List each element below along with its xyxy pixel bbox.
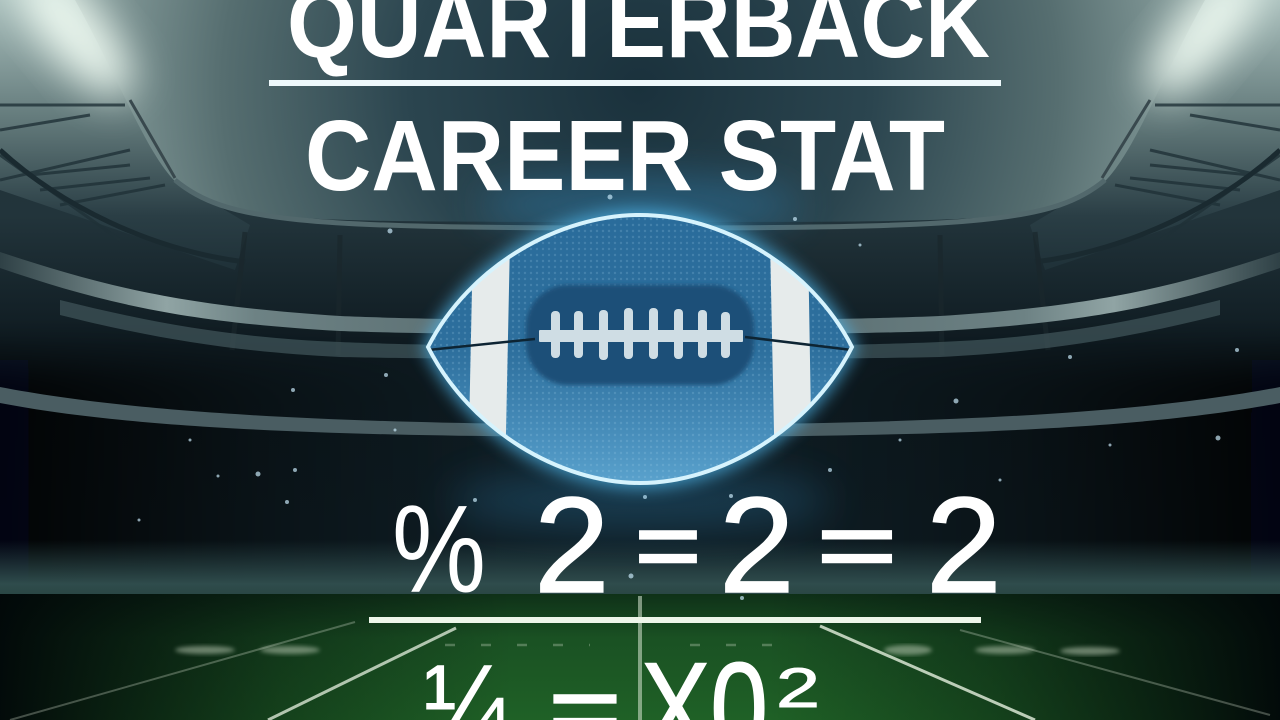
title: career stat: CAREER STAT — [305, 100, 945, 212]
ball right stripe — [770, 259, 811, 434]
lower stand panel — [60, 300, 1220, 359]
formula: upper line: % — [392, 481, 486, 619]
upper stand band — [0, 252, 1280, 335]
field lines — [10, 596, 1270, 720]
ball left stripe — [470, 259, 510, 434]
floodlight: right — [1132, 0, 1278, 111]
grass vignette — [0, 594, 1280, 720]
formula: upper line: 2 — [719, 469, 795, 621]
formula: upper line: = — [817, 493, 897, 599]
formula: lower line: 2 — [776, 656, 820, 719]
formula: upper line: = — [635, 493, 701, 599]
side vignette — [0, 360, 1280, 720]
title divider — [269, 80, 1001, 86]
formula: upper line — [392, 469, 1002, 621]
ball glow behind text — [480, 175, 800, 235]
lower walkway band — [0, 387, 1280, 437]
ball outline — [428, 215, 852, 483]
sparkles — [138, 194, 1239, 600]
icon: glowing football — [420, 209, 860, 490]
formula: lower line — [424, 635, 820, 720]
floodlight: left — [1, 0, 149, 113]
sky — [75, 0, 1205, 222]
laces — [539, 308, 743, 360]
fog — [0, 540, 1280, 595]
grass — [0, 594, 1280, 720]
formula: upper line: 2 — [534, 469, 610, 621]
formula: upper line: 2 — [926, 469, 1002, 621]
formula divider — [369, 617, 981, 623]
roof: right — [1030, 0, 1280, 270]
yard numbers — [175, 645, 1120, 655]
ball center panel — [526, 285, 754, 385]
roof: left — [0, 0, 250, 270]
